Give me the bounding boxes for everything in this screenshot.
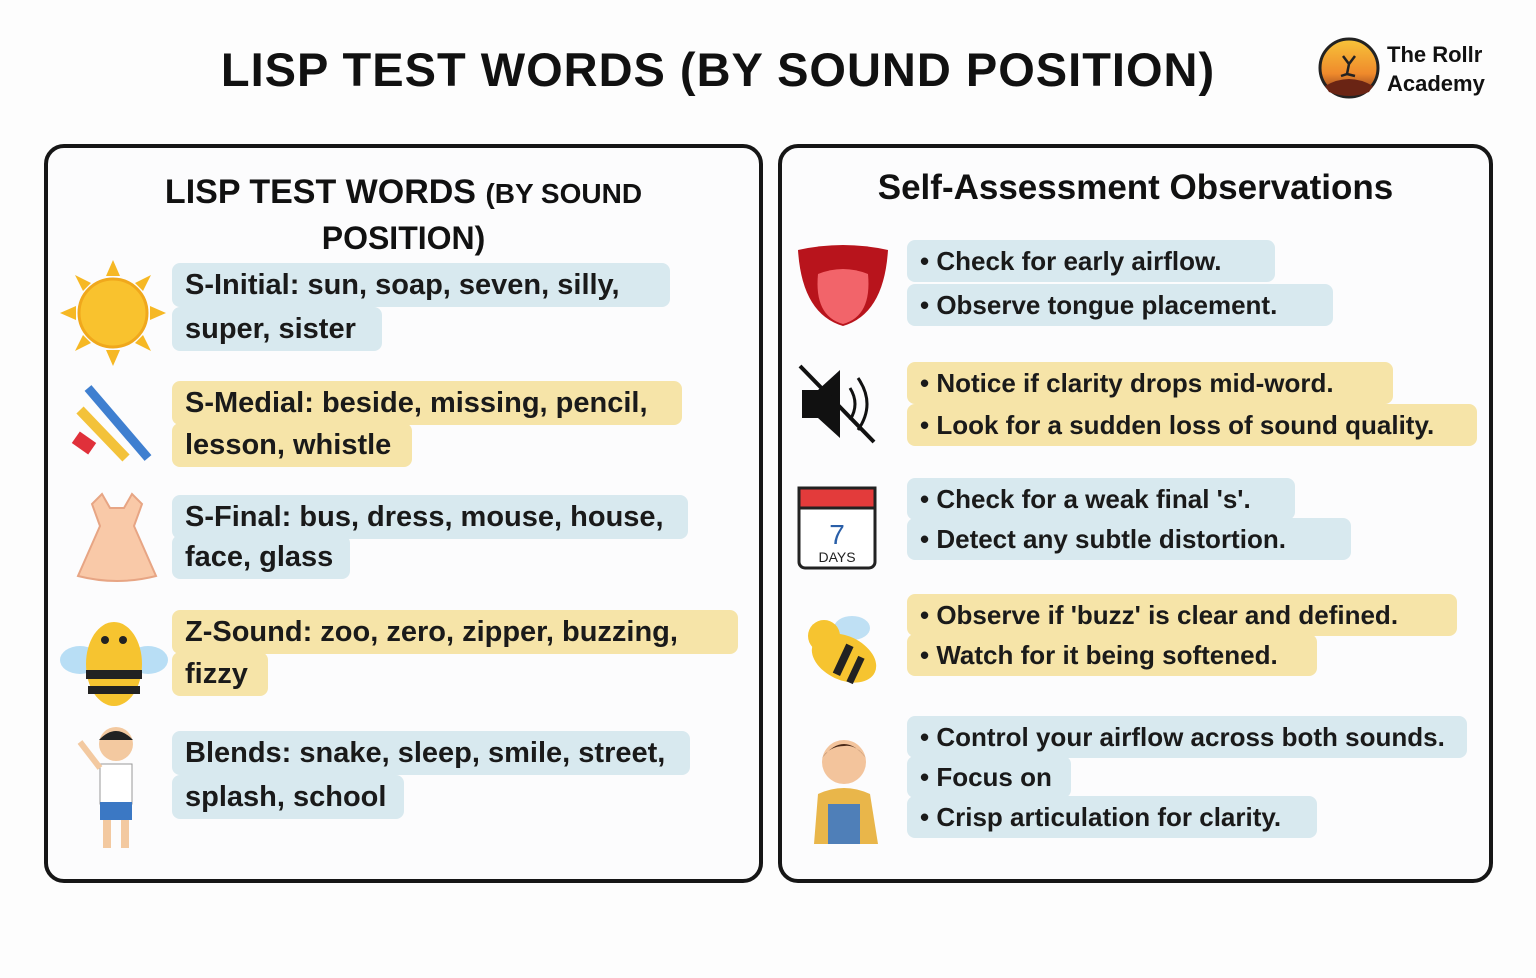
words: S-Initial [172,263,670,351]
words: S-Initial: S-Initial: sun, soap, seven, silly, [185,269,620,301]
words: S-Final [172,495,688,579]
panel: right [778,144,1493,883]
obs 5: • Control your airflow across both sounds. [920,722,1445,752]
obs 5: • Focus on [920,762,1052,792]
words: S-Final: S-Final: bus, dress, mouse, house, [185,501,664,533]
heading left: LISP TEST WORDS (BY SOUND [165,173,642,211]
obs 3 [907,478,1351,560]
obs 5: • Crisp articulation for clarity. [920,802,1281,832]
words: Z-Sound: Z-Sound: zoo, zero, zipper, buzzing, [185,616,678,648]
icon: pencils [72,385,152,462]
icon: bee 2 [808,616,876,684]
panel: left [44,144,763,883]
obs 1: • Observe tongue placement. [920,290,1277,320]
words: Z-Sound [172,610,738,696]
words: S-Initial: super, sister [185,313,356,345]
logo: Academy [1387,71,1485,96]
icon: muted speaker [798,364,876,444]
obs 2 [907,362,1477,446]
heading left: POSITION) [322,220,485,256]
words: Blends: splash, school [185,781,386,813]
obs 5 [907,716,1467,838]
icon: dress [76,492,158,582]
obs 1: • Check for early airflow. [920,246,1221,276]
icon: mouth [798,245,888,326]
icon: bee [60,622,168,706]
words: Blends: Blends: snake, sleep, smile, street, [185,737,665,769]
icon: calendar [798,486,876,570]
title: LISP TEST WORDS (BY SOUND POSITION) [221,43,1215,96]
obs 3: • Check for a weak final 's'. [920,484,1251,514]
logo [1318,38,1485,98]
words: S-Medial: S-Medial: beside, missing, pencil, [185,387,648,419]
obs 2: • Notice if clarity drops mid-word. [920,368,1334,398]
logo: The Rollr [1387,42,1482,67]
heading left [165,173,642,256]
words: Z-Sound: fizzy [185,658,248,690]
obs 1 [907,240,1333,326]
icon: boy [78,727,133,848]
words: S-Medial [172,381,682,467]
icon: calendar: DAYS [818,549,856,565]
obs 2: • Look for a sudden loss of sound quality. [920,410,1434,440]
obs 4 [907,594,1457,676]
words: S-Final: face, glass [185,541,333,573]
icon: child [814,740,878,844]
words: S-Medial: lesson, whistle [185,429,391,461]
icon: sun [60,260,166,366]
words: Blends [172,731,690,819]
obs 4: • Watch for it being softened. [920,640,1278,670]
obs 3: • Detect any subtle distortion. [920,524,1286,554]
heading right: Self-Assessment Observations [878,168,1393,207]
obs 4: • Observe if 'buzz' is clear and defined. [920,600,1398,630]
icon: calendar: 7 [829,519,845,550]
